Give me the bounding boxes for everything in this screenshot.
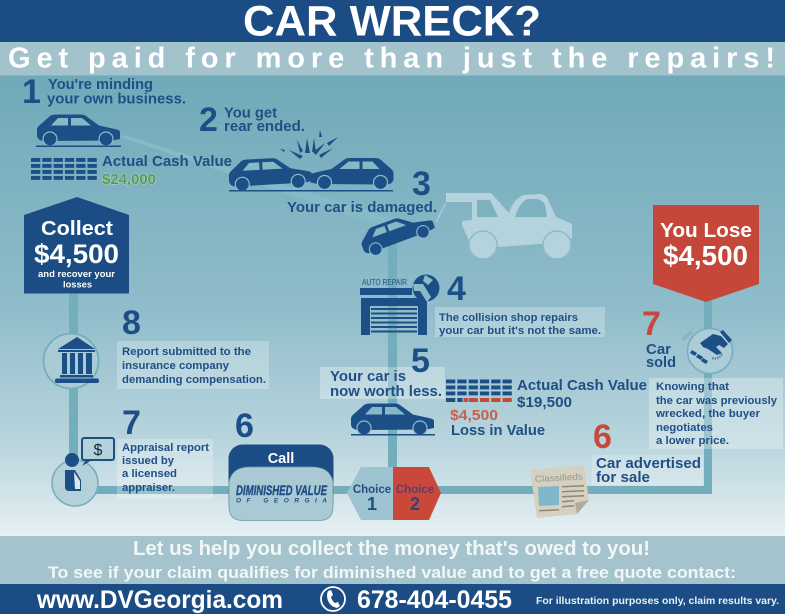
step 6 call: 6: [235, 407, 254, 445]
collect box: losses: [63, 280, 92, 290]
icon: bank: [44, 334, 99, 388]
step 2: 2: [199, 101, 218, 139]
step 1: 1: [22, 73, 41, 111]
actual cash value $19,500: $19,500: [517, 394, 572, 411]
step 5: Your car is: [330, 369, 406, 385]
actual cash value $19,500: $4,500: [450, 408, 498, 424]
choice 1 and 2: Choice: [353, 484, 391, 496]
step 7 appraisal: appraiser.: [122, 482, 175, 494]
step 7 appraisal: issued by: [122, 455, 175, 467]
step 2: [199, 101, 394, 192]
step 5: [320, 342, 445, 436]
actual cash value $19,500: Loss in Value: [451, 422, 545, 439]
icon: handshake: [681, 328, 732, 374]
icon: crash cars: [228, 130, 394, 192]
icon: phone: [321, 587, 345, 611]
text box: negotiates: [656, 422, 713, 434]
text box: your car but it's not the same.: [439, 325, 601, 337]
step 5: now worth less.: [330, 384, 442, 400]
step 3: Your car is damaged.: [287, 199, 437, 216]
actual cash value $24,000: $24,000: [102, 171, 156, 188]
subtitle band: [0, 42, 785, 76]
step 4: [360, 270, 605, 337]
footer band: www.DVGeorgia.com: [36, 586, 283, 614]
you lose box: You Lose: [660, 219, 752, 242]
call to action band: To see if your claim qualifies for diminished value and to get a free quote contact:: [48, 564, 736, 582]
step 7 appraisal: 7: [122, 404, 141, 442]
actual cash value $19,500: Actual Cash Value: [517, 377, 647, 394]
step 7 car sold: 7: [642, 305, 661, 343]
actual cash value $24,000: Actual Cash Value: [102, 153, 232, 170]
crash sparks: [280, 130, 338, 159]
flow path lines: [69, 135, 712, 494]
step 6 call: OF GEORGIA: [236, 498, 327, 504]
step 3: [287, 165, 572, 259]
text box: The collision shop repairs: [439, 312, 578, 324]
you lose box: $4,500: [663, 240, 748, 271]
step 8: 8: [122, 304, 141, 342]
step 7 car sold: [642, 305, 783, 449]
text box: wrecked, the buyer: [655, 408, 761, 420]
icon: tow truck: [436, 193, 572, 259]
step 2: rear ended.: [224, 119, 305, 135]
text box: Knowing that: [656, 381, 729, 393]
step 7 car sold: sold: [646, 355, 676, 371]
choice 1 and 2: [347, 467, 441, 520]
icon: damaged car on hook: [357, 207, 437, 259]
page background: [0, 75, 785, 536]
step 8: demanding compensation.: [122, 374, 266, 386]
actual cash value $24,000: [31, 153, 232, 188]
footer band: [0, 584, 785, 614]
collect box: $4,500: [34, 239, 119, 269]
step 2: You get: [224, 106, 277, 122]
step 4: 4: [447, 270, 466, 308]
step 3: 3: [412, 165, 431, 203]
step 5: 5: [411, 342, 430, 380]
footer band: For illustration purposes only, claim results vary.: [536, 595, 779, 607]
collect box: and recover your: [38, 269, 115, 280]
step 6 car advertised: Car advertised: [596, 455, 701, 472]
step 7 car sold: Car: [646, 342, 671, 358]
step 1: You're minding: [48, 77, 153, 93]
step 6 car advertised: [592, 418, 703, 486]
you lose box: [653, 205, 759, 302]
choice 1 and 2: 1: [367, 494, 377, 514]
icon: auto repair shop: [360, 274, 440, 335]
step 6 call: [228, 407, 334, 520]
call to action band: Let us help you collect the money that's owed to you!: [133, 537, 650, 560]
icon: classifieds newspaper: Classifieds: [535, 471, 584, 484]
call to action band: [0, 536, 785, 584]
icon: car: [351, 404, 435, 436]
step 1: your own business.: [47, 92, 186, 108]
step 6 car advertised: 6: [593, 418, 612, 456]
step 7 appraisal: Appraisal report: [122, 442, 209, 454]
text box: [649, 378, 783, 449]
step 7 appraisal: a licensed: [122, 468, 177, 480]
step 8: insurance company: [122, 360, 230, 372]
step 8: [117, 304, 269, 389]
collect box: [24, 197, 129, 294]
icon: auto repair shop: AUTO REPAIR: [362, 277, 407, 287]
step 6 car advertised: for sale: [596, 469, 650, 486]
footer band: 678-404-0455: [357, 586, 512, 614]
step 6 call: DIMINISHED VALUE: [236, 482, 327, 498]
icon: appraiser: [52, 438, 114, 506]
step 1: [22, 73, 186, 147]
icon: appraiser: $: [94, 442, 103, 459]
text box: a lower price.: [656, 435, 729, 447]
actual cash value $19,500: [446, 377, 647, 439]
header band: [0, 0, 785, 46]
choice 1 and 2: Choice: [396, 484, 434, 496]
step 6 call: Call: [268, 451, 294, 467]
subtitle: Get paid for more than just the repairs!: [8, 42, 775, 74]
text box: [435, 307, 605, 337]
step 7 appraisal: [117, 404, 213, 499]
icon: classifieds newspaper: [530, 465, 589, 518]
collect box: Collect: [41, 217, 113, 240]
choice 1 and 2: 2: [410, 494, 420, 514]
icon: car: [36, 114, 121, 147]
step 8: Report submitted to the: [122, 346, 251, 358]
text box: the car was previously: [656, 395, 778, 407]
